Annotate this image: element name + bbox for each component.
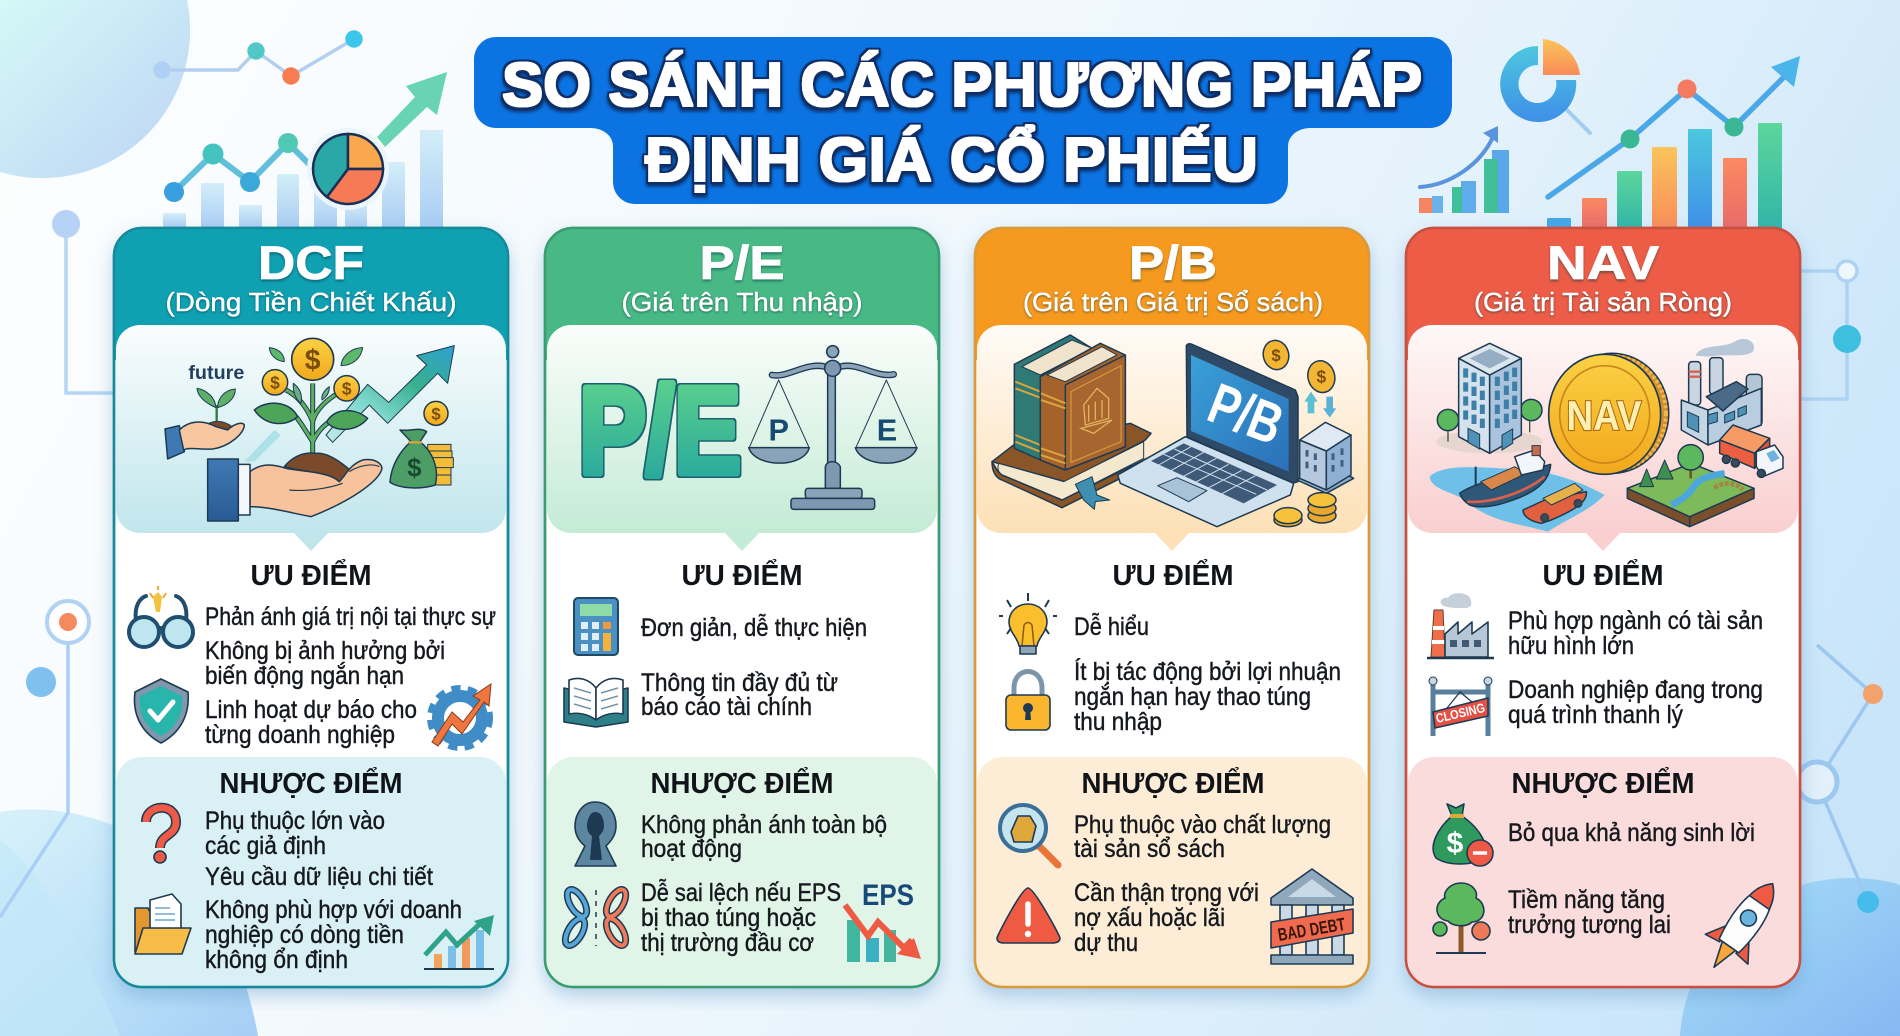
text: pros 2: Thông tin đầy đủ từ [641, 669, 838, 697]
icon: money bag minus [1433, 804, 1493, 866]
title line 2: ĐỊNH GIÁ CỔ PHIẾU [645, 125, 1258, 195]
icon: magnifier [1000, 805, 1058, 865]
section: pros P/E: ƯU ĐIỂM [682, 558, 802, 592]
text: pros 1: Đơn giản, dễ thực hiện [641, 613, 867, 642]
section: pros NAV: ƯU ĐIỂM [1542, 558, 1664, 592]
coins: $ [305, 344, 321, 376]
panel: P/B [975, 228, 1369, 987]
heading: DCF: (Dòng Tiền Chiết Khấu) [166, 287, 456, 317]
heading: DCF [166, 236, 456, 317]
text: pros 3: Linh hoạt dự báo cho [205, 696, 417, 724]
icon: keyhole [575, 802, 616, 866]
illustration: P/E scales: P/E [579, 363, 741, 500]
section: cons P/E: NHƯỢC ĐIỂM [650, 766, 834, 800]
text: cons 1: Phụ thuộc lớn vào [205, 807, 385, 835]
factory [1681, 339, 1762, 445]
text: cons 1: hoạt động [641, 835, 742, 863]
text: cons 3: không ổn định [205, 946, 348, 974]
text: cons 1: Không phản ánh toàn bộ [641, 811, 887, 839]
text: cons 2 [641, 878, 841, 957]
big hand with soil [208, 453, 382, 521]
top-left line chart [153, 30, 363, 85]
text: pros 3: từng doanh nghiệp [205, 721, 395, 749]
icon: warning triangle [997, 888, 1060, 943]
text: pros 1: Dễ hiểu [1074, 612, 1149, 641]
text: cons 2: Cần thận trọng với [1074, 879, 1259, 907]
title banner [474, 37, 1452, 204]
right large bar chart with arrow [1547, 56, 1800, 230]
flat book [992, 423, 1151, 509]
icon: small growth chart [424, 915, 494, 969]
section: cons P/B [977, 757, 1367, 986]
section: pros NAV [1427, 558, 1763, 736]
section: pros DCF [129, 558, 496, 749]
section: cons NAV: NHƯỢC ĐIỂM [1512, 766, 1694, 800]
left circuit decorations [0, 210, 116, 917]
heading: DCF: DCF [258, 236, 364, 289]
trees and office building [1436, 343, 1543, 453]
icon: folder [135, 894, 191, 954]
text: pros 2: thu nhập [1074, 708, 1162, 736]
text: cons 2: trưởng tương lai [1508, 911, 1671, 939]
right circuit decorations [1797, 261, 1883, 913]
text: pros 2: Ít bị tác động bởi lợi nhuận [1074, 657, 1341, 686]
section: cons NAV [1408, 757, 1798, 986]
icon: money bag minus: $ [1447, 827, 1464, 860]
text: pros 2: Doanh nghiệp đang trong [1508, 676, 1763, 704]
section: cons P/B: NHƯỢC ĐIỂM [1082, 766, 1264, 800]
balance scale: E [877, 414, 897, 448]
section: cons DCF: NHƯỢC ĐIỂM [220, 766, 402, 800]
growth arrow [326, 346, 454, 442]
laptop [1118, 344, 1298, 527]
right top donut icon [1500, 39, 1590, 133]
heading: P/B: P/B [1129, 236, 1217, 289]
icon: question mark [146, 808, 176, 863]
brown book [1040, 343, 1125, 470]
text: cons 1 [641, 811, 887, 863]
pie icon [307, 128, 389, 210]
illustration: DCF growing money plant: future [188, 363, 245, 384]
land tile [1627, 445, 1754, 527]
icon: padlock [1006, 672, 1050, 730]
text: pros 3 [205, 696, 417, 749]
coins and arrows: $ [1317, 367, 1327, 387]
text: cons 2: Dễ sai lệch nếu EPS [641, 878, 841, 907]
laptop: P/B [1200, 371, 1292, 458]
icon: bank with bad debt banner: BAD DEBT [1276, 914, 1347, 945]
icon: EPS falling [845, 879, 921, 962]
text: cons 1 [1074, 811, 1331, 863]
text: pros 1 [1508, 607, 1763, 660]
text: cons 2: dự thu [1074, 929, 1138, 957]
heading: NAV: (Giá trị Tài sản Ròng) [1474, 287, 1732, 317]
illustration: P/E scales [547, 325, 937, 551]
text: cons 2: bị thao túng hoặc [641, 904, 816, 932]
money bag and coin stack [390, 429, 453, 488]
text: cons 1 [205, 807, 385, 860]
green rising arrow [377, 72, 447, 147]
coins [262, 338, 448, 425]
icon: tree [1433, 883, 1490, 953]
NAV coin [1549, 353, 1669, 474]
icon: broken chain [561, 887, 630, 948]
text: cons 2: nợ xấu hoặc lãi [1074, 904, 1225, 932]
heading: P/E: (Giá trên Thu nhập) [622, 287, 862, 317]
coins: $ [342, 379, 352, 399]
text: cons 3: Không phù hợp với doanh [205, 896, 462, 924]
illustration: P/B books and laptop [977, 325, 1367, 551]
coins and arrows: $ [1271, 346, 1281, 365]
section: cons DCF [116, 757, 506, 986]
NAV coin: NAV [1566, 392, 1641, 439]
right small bar chart [1419, 126, 1509, 213]
truck [1720, 425, 1783, 477]
heading: P/E [622, 236, 862, 317]
coins: $ [270, 373, 280, 393]
money bag and coin stack: $ [407, 453, 422, 483]
text: pros 2: ngắn hạn hay thao túng [1074, 682, 1311, 711]
text: cons 1: tài sản sổ sách [1074, 835, 1225, 863]
icon: gear with arrow [431, 684, 491, 747]
icon: EPS falling: EPS [862, 879, 914, 912]
coin stacks [1274, 493, 1336, 527]
heading: NAV: NAV [1547, 236, 1660, 289]
text: cons 1: các giả định [205, 832, 326, 860]
icon: open book [564, 678, 628, 727]
heading: NAV [1474, 236, 1732, 317]
text: cons 2: thị trường đầu cơ [641, 929, 814, 957]
icon: factory [1427, 593, 1494, 658]
faint arrow band [244, 430, 281, 462]
icon: lightbulb [999, 593, 1057, 654]
coins: $ [431, 404, 441, 423]
text: pros 2: biến động ngắn hạn [205, 661, 404, 690]
text: pros 2: báo cáo tài chính [641, 693, 812, 721]
top-left bar and line chart with pie [163, 72, 447, 229]
section: pros DCF: ƯU ĐIỂM [250, 558, 372, 592]
panel: NAV [1406, 228, 1800, 987]
small building [1297, 422, 1354, 493]
panel: DCF [114, 228, 508, 987]
section: pros P/E [564, 558, 867, 727]
text: cons 2 [1508, 886, 1671, 939]
text: pros 1: hữu hình lớn [1508, 632, 1634, 660]
water, ship and barge [1430, 446, 1605, 532]
balance scale [749, 346, 917, 509]
text: cons 1: Phụ thuộc vào chất lượng [1074, 811, 1331, 839]
section: pros P/B: ƯU ĐIỂM [1112, 558, 1234, 592]
plant [254, 348, 368, 453]
coins and arrows [1260, 338, 1338, 418]
icon: shield [134, 679, 188, 743]
panel: P/E [545, 228, 939, 987]
illustration: DCF growing money plant [116, 325, 506, 551]
icon: calculator [574, 598, 618, 655]
text: cons 3: nghiệp có dòng tiền [205, 921, 404, 949]
text: cons 3 [205, 896, 462, 974]
text: cons 2 [1074, 879, 1259, 957]
text: cons 1: Bỏ qua khả năng sinh lời [1508, 819, 1755, 847]
text: pros 1: Phản ánh giá trị nội tại thực sự [205, 603, 496, 631]
illustration: NAV coin and assets [1408, 325, 1798, 551]
icon: glasses [129, 586, 193, 647]
icon: rocket [1693, 869, 1794, 982]
heading: P/E: P/E [700, 236, 784, 289]
text: pros 2 [205, 637, 445, 690]
heading: P/B [1023, 236, 1323, 317]
text: cons 2: Yêu cầu dữ liệu chi tiết [205, 863, 433, 891]
text: pros 2 [641, 669, 838, 721]
text: pros 2: quá trình thanh lý [1508, 701, 1683, 729]
icon: bank with bad debt banner [1271, 869, 1353, 964]
icon: closing sign: CLOSING [1434, 700, 1486, 726]
text: pros 2 [1508, 676, 1763, 729]
section: cons P/E [547, 757, 937, 986]
text: pros 2 [1074, 657, 1341, 736]
text: pros 1: Phù hợp ngành có tài sản [1508, 607, 1763, 635]
section: pros P/B [999, 558, 1341, 736]
heading: P/B: (Giá trên Giá trị Sổ sách) [1023, 287, 1323, 317]
title line 1: SO SÁNH CÁC PHƯƠNG PHÁP [502, 51, 1422, 120]
small plant in hand [165, 388, 244, 459]
balance scale: P [768, 414, 789, 448]
icon: closing sign [1429, 677, 1492, 736]
text: pros 2: Không bị ảnh hưởng bởi [205, 637, 445, 665]
text: cons 2: Tiềm năng tăng [1508, 886, 1665, 914]
green book [1014, 335, 1092, 460]
